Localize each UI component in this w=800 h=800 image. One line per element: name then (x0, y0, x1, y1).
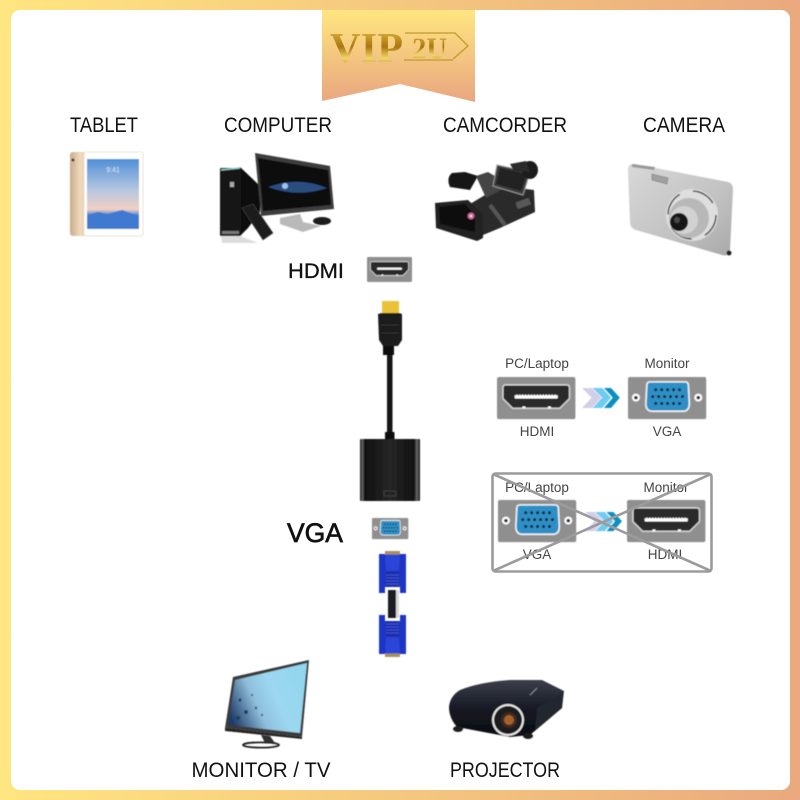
HDMI gold tip (382, 301, 399, 313)
label: projector: PROJECTOR (450, 759, 560, 782)
caption: HDMI: HDMI (520, 424, 554, 439)
label: monitor / TV: MONITOR / TV (192, 759, 330, 782)
adapter box (360, 439, 420, 501)
adapter: HDMI plug and cable (360, 301, 420, 501)
logo text: VIP: VIP (330, 26, 403, 72)
label: HDMI: HDMI (288, 260, 344, 283)
diagram: unsupported direction crossed out (492, 474, 712, 572)
diagram: supported direction (497, 356, 706, 439)
arrows (582, 388, 620, 408)
caption: Monitor: Monitor (644, 356, 690, 371)
logo arrow outline (404, 33, 468, 60)
port: HDMI right (627, 500, 705, 542)
port: VGA left (498, 500, 576, 542)
cross-out frame (492, 474, 712, 572)
caption: VGA crossed: VGA (523, 547, 551, 562)
label: camcorder: CAMCORDER (443, 114, 567, 137)
icon: camcorder (435, 161, 538, 241)
icon: HDMI port small (367, 257, 412, 282)
port: HDMI (497, 377, 575, 419)
caption: PC/Laptop: PC/Laptop (505, 356, 569, 371)
caption: VGA: VGA (653, 424, 681, 439)
caption: Monitor crossed: Monitor (643, 480, 689, 495)
caption: HDMI crossed: HDMI (648, 547, 682, 562)
logo banner (322, 10, 475, 102)
port: VGA (628, 377, 706, 419)
icon: projector (449, 680, 564, 739)
icon: tablet: 9:41 (106, 167, 120, 174)
icon: computer (220, 153, 334, 243)
label: computer: COMPUTER (224, 114, 332, 137)
VGA cable (379, 551, 406, 657)
label: tablet: TABLET (70, 114, 138, 137)
icon: tablet (70, 152, 143, 236)
logo text: 2U: 2U (412, 32, 447, 65)
icon: camera (628, 164, 733, 256)
arrows crossed (585, 512, 622, 531)
icon: VGA port small (372, 518, 408, 539)
label: camera: CAMERA (643, 114, 725, 137)
label: VGA: VGA (287, 518, 343, 548)
caption: PC/Laptop crossed: PC/Laptop (505, 480, 569, 495)
icon: monitor / TV (225, 660, 309, 748)
